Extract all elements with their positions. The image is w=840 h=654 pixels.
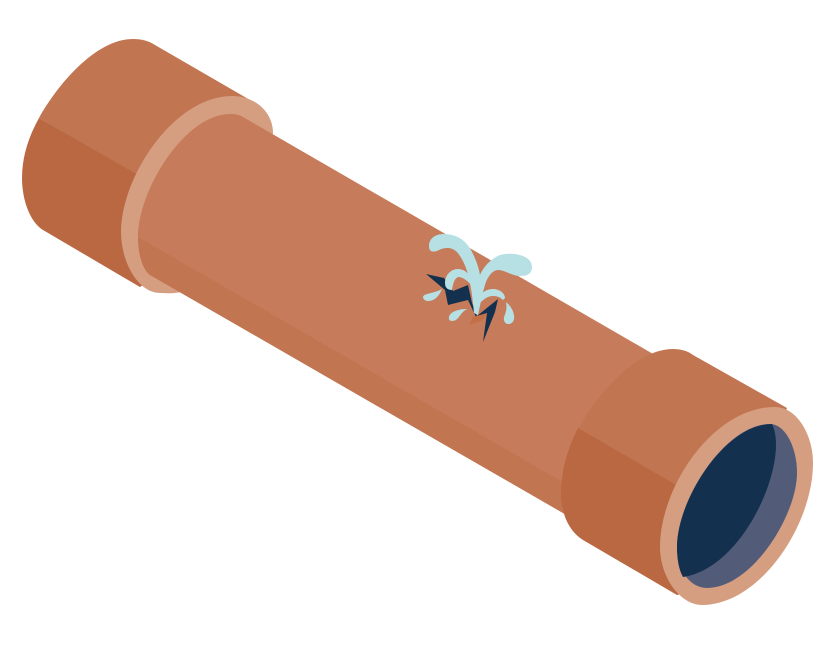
left curl xyxy=(445,269,472,290)
crack inner edge xyxy=(469,313,487,325)
end ring xyxy=(660,407,813,605)
drop lower xyxy=(449,309,467,321)
right curl xyxy=(480,289,505,303)
drop left xyxy=(423,289,442,301)
collar ring xyxy=(121,96,273,293)
crack xyxy=(426,274,498,342)
water spray xyxy=(423,234,532,324)
pipe opening xyxy=(677,424,797,588)
pipe body xyxy=(138,114,660,522)
main jet xyxy=(429,234,532,315)
opening shadow xyxy=(677,424,776,577)
drop right xyxy=(504,302,514,324)
right collar xyxy=(561,349,813,605)
pipe shadow xyxy=(138,237,580,522)
left collar xyxy=(22,39,273,293)
